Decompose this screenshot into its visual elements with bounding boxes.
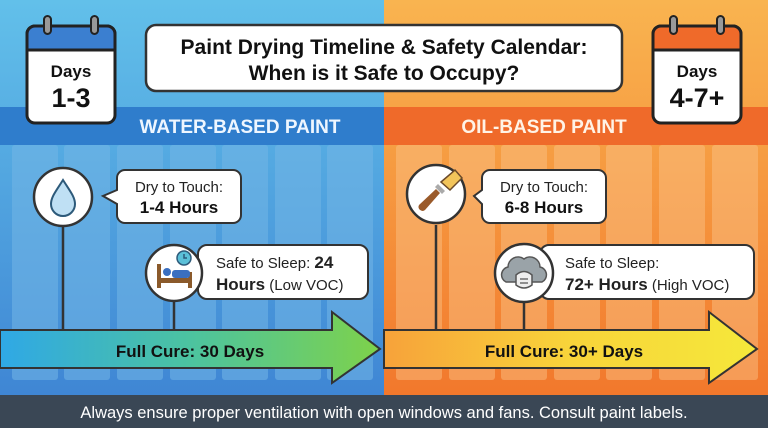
icon: calendar days 1-3: Days [51, 62, 91, 81]
icon: paint brush [407, 165, 465, 223]
arrow: water full cure: Full Cure: 30 Days [116, 342, 264, 361]
callout: safe to sleep 72+ hours: 72+ Hours (High VOC) [565, 275, 729, 294]
icon: fume cloud with mask [495, 244, 553, 302]
footer [0, 395, 768, 428]
callout: safe to sleep 72+ hours: Safe to Sleep: [565, 255, 659, 272]
icon: bed with clock [146, 245, 202, 301]
icon: water drop [34, 168, 92, 226]
callout: safe to sleep 72+ hours [540, 245, 754, 299]
callout: safe to sleep 24 hours: Safe to Sleep: 24 [216, 253, 334, 272]
title [146, 25, 622, 91]
callout: dry to touch 1-4 hours: 1-4 Hours [140, 198, 218, 217]
arrow: oil full cure [384, 312, 757, 383]
heading: water-based paint: WATER-BASED PAINT [140, 117, 341, 138]
arrow: oil full cure: Full Cure: 30+ Days [485, 342, 643, 361]
callout: safe to sleep 24 hours [198, 245, 368, 299]
panel: oil-based background [384, 0, 768, 395]
panel: water-based background [0, 0, 384, 395]
callout: dry to touch 6-8 hours: 6-8 Hours [505, 198, 583, 217]
callout: safe to sleep 24 hours: Hours (Low VOC) [216, 275, 343, 294]
arrow: water full cure [0, 312, 380, 383]
callout: dry to touch 1-4 hours [103, 170, 241, 223]
icon: calendar days 4-7+: 4-7+ [670, 83, 724, 113]
heading: oil-based paint: OIL-BASED PAINT [461, 117, 627, 138]
icon: calendar days 4-7+ [653, 16, 741, 123]
icon: calendar days 1-3 [27, 16, 115, 123]
callout: dry to touch 1-4 hours: Dry to Touch: [135, 179, 223, 196]
callout: dry to touch 6-8 hours: Dry to Touch: [500, 179, 588, 196]
callout: dry to touch 6-8 hours [474, 170, 606, 223]
icon: calendar days 4-7+: Days [677, 62, 717, 81]
title: When is it Safe to Occupy? [249, 62, 519, 85]
title: Paint Drying Timeline & Safety Calendar: [181, 36, 587, 59]
footer: Always ensure proper ventilation with open windows and fans. Consult paint labels. [80, 404, 688, 422]
icon: calendar days 1-3: 1-3 [51, 83, 91, 113]
stems [63, 225, 524, 330]
